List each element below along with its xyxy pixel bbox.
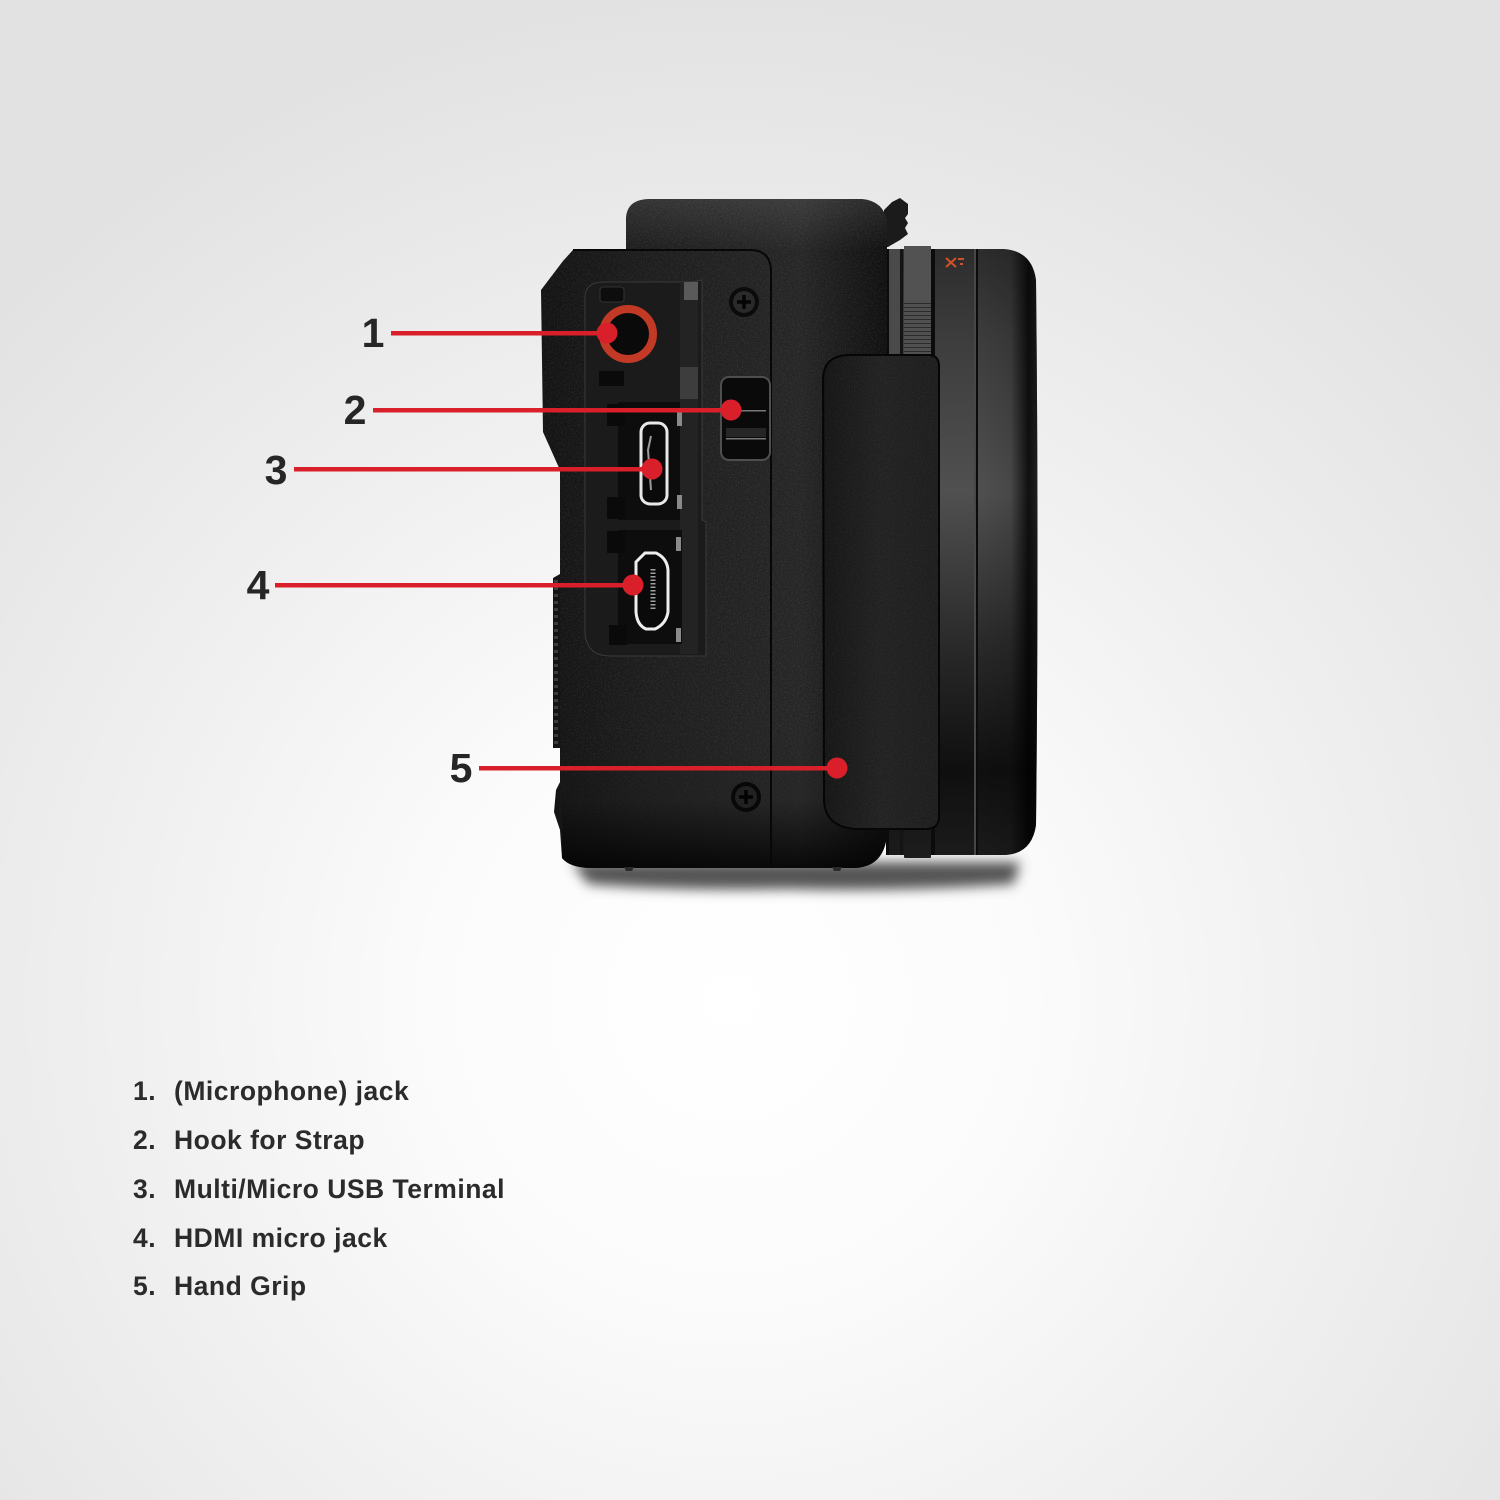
- front ring: [978, 249, 1038, 855]
- hand grip: [823, 355, 939, 829]
- callout 2: 2: [344, 387, 366, 433]
- legend item 2: Hook for Strap: [174, 1125, 365, 1155]
- screws: [729, 287, 761, 812]
- callout 2: [344, 387, 742, 433]
- callout 3: 3: [265, 447, 287, 493]
- callout 1: [362, 310, 618, 356]
- left edge highlight: [563, 262, 573, 850]
- dial knurling: [554, 580, 558, 746]
- zoom lever: [884, 198, 908, 247]
- rear ring: [886, 249, 906, 855]
- middle ring: [935, 249, 975, 855]
- callout 4: [247, 562, 644, 608]
- legend list: [133, 1076, 505, 1301]
- orange marking: [946, 258, 964, 267]
- callout 5: [450, 745, 848, 791]
- legend item 1: 1.: [133, 1076, 156, 1106]
- body shell: [541, 199, 887, 868]
- legend item 2: 2.: [133, 1125, 156, 1155]
- control ring: [904, 246, 931, 858]
- icon: strap hook: [721, 377, 770, 460]
- callout 1: 1: [362, 310, 384, 356]
- legend item 5: 5.: [133, 1271, 156, 1301]
- lens barrel: [886, 246, 1038, 858]
- icon: hdmi port: [636, 553, 668, 629]
- legend item 5: Hand Grip: [174, 1271, 307, 1301]
- legend item 4: HDMI micro jack: [174, 1223, 388, 1253]
- legend item 3: Multi/Micro USB Terminal: [174, 1174, 505, 1204]
- icon: microphone jack: [603, 309, 653, 359]
- legend item 4: 4.: [133, 1223, 156, 1253]
- legend item 1: (Microphone) jack: [174, 1076, 409, 1106]
- bottom feet: [624, 867, 842, 871]
- port recess: [585, 280, 706, 656]
- callout 4: 4: [247, 562, 270, 608]
- body texture: [541, 199, 887, 868]
- camera: [541, 198, 1038, 890]
- ground shadow: [572, 862, 1020, 890]
- icon: usb port: [641, 423, 667, 504]
- callout 3: [265, 447, 662, 493]
- legend item 3: 3.: [133, 1174, 156, 1204]
- callout 5: 5: [450, 745, 472, 791]
- port door panel: [573, 250, 771, 868]
